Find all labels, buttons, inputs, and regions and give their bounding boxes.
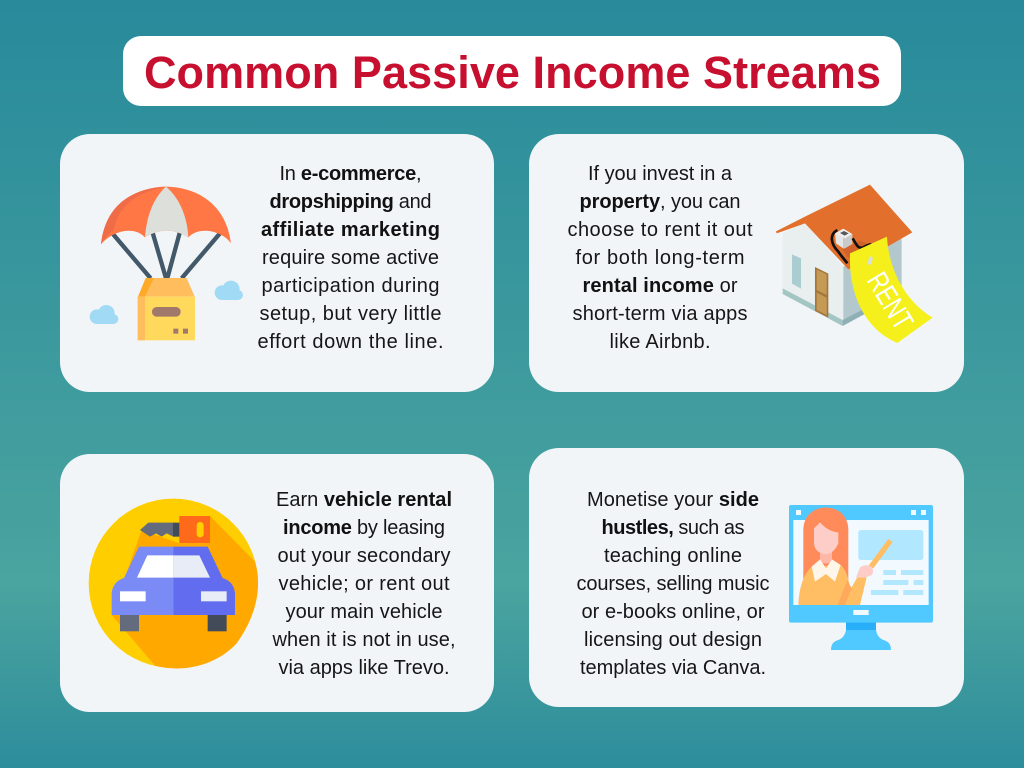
panel: property bbox=[529, 134, 964, 392]
text: side hustles: or e-books online, or bbox=[582, 601, 765, 623]
text: vehicle: income by leasing bbox=[283, 517, 445, 539]
text: e-commerce: setup, but very little bbox=[260, 303, 442, 325]
text: property: property, you can bbox=[580, 191, 740, 213]
panel: side hustles bbox=[529, 448, 964, 707]
text: e-commerce: affiliate marketing bbox=[261, 219, 440, 241]
text: vehicle: out your secondary bbox=[278, 545, 450, 567]
text: side hustles: courses, selling music bbox=[576, 573, 770, 595]
text: property bbox=[568, 163, 753, 353]
text: property: choose to rent it out bbox=[568, 219, 753, 241]
text: e-commerce: effort down the line. bbox=[258, 331, 444, 353]
text: property: like Airbnb. bbox=[610, 331, 710, 353]
text: side hustles: teaching online bbox=[604, 545, 742, 567]
text: e-commerce: dropshipping and bbox=[270, 191, 432, 213]
icon: car with key bbox=[89, 499, 258, 668]
text: e-commerce: require some active bbox=[262, 247, 439, 269]
text: property: rental income or bbox=[582, 275, 738, 297]
text: property: for both long-term bbox=[576, 247, 744, 269]
text: vehicle: when it is not in use, bbox=[272, 629, 456, 651]
title: Common Passive Income Streams bbox=[144, 47, 881, 98]
text: side hustles bbox=[576, 489, 770, 679]
text: side hustles: templates via Canva. bbox=[580, 657, 766, 679]
text: vehicle: via apps like Trevo. bbox=[278, 657, 450, 679]
text: property: short-term via apps bbox=[572, 303, 748, 325]
text: vehicle: vehicle; or rent out bbox=[278, 573, 450, 595]
icon: online teacher on monitor bbox=[789, 505, 933, 650]
icon: house with rent tag bbox=[776, 185, 933, 343]
title bbox=[123, 36, 901, 106]
text: vehicle: your main vehicle bbox=[286, 601, 442, 623]
icon: parachute with box bbox=[90, 187, 243, 340]
text: vehicle bbox=[272, 489, 456, 679]
panel: vehicle bbox=[60, 454, 494, 712]
text: side hustles: licensing out design bbox=[584, 629, 762, 651]
icon: house with rent tag: RENT bbox=[860, 267, 920, 336]
text: e-commerce: participation during bbox=[262, 275, 440, 297]
text: side hustles: hustles, such as bbox=[602, 517, 744, 539]
text: e-commerce bbox=[258, 163, 444, 353]
text: e-commerce: In e-commerce, bbox=[280, 163, 422, 185]
text: side hustles: Monetise your side bbox=[587, 489, 759, 511]
text: property: If you invest in a bbox=[588, 163, 733, 185]
panel: e-commerce bbox=[60, 134, 494, 392]
text: vehicle: Earn vehicle rental bbox=[276, 489, 452, 511]
